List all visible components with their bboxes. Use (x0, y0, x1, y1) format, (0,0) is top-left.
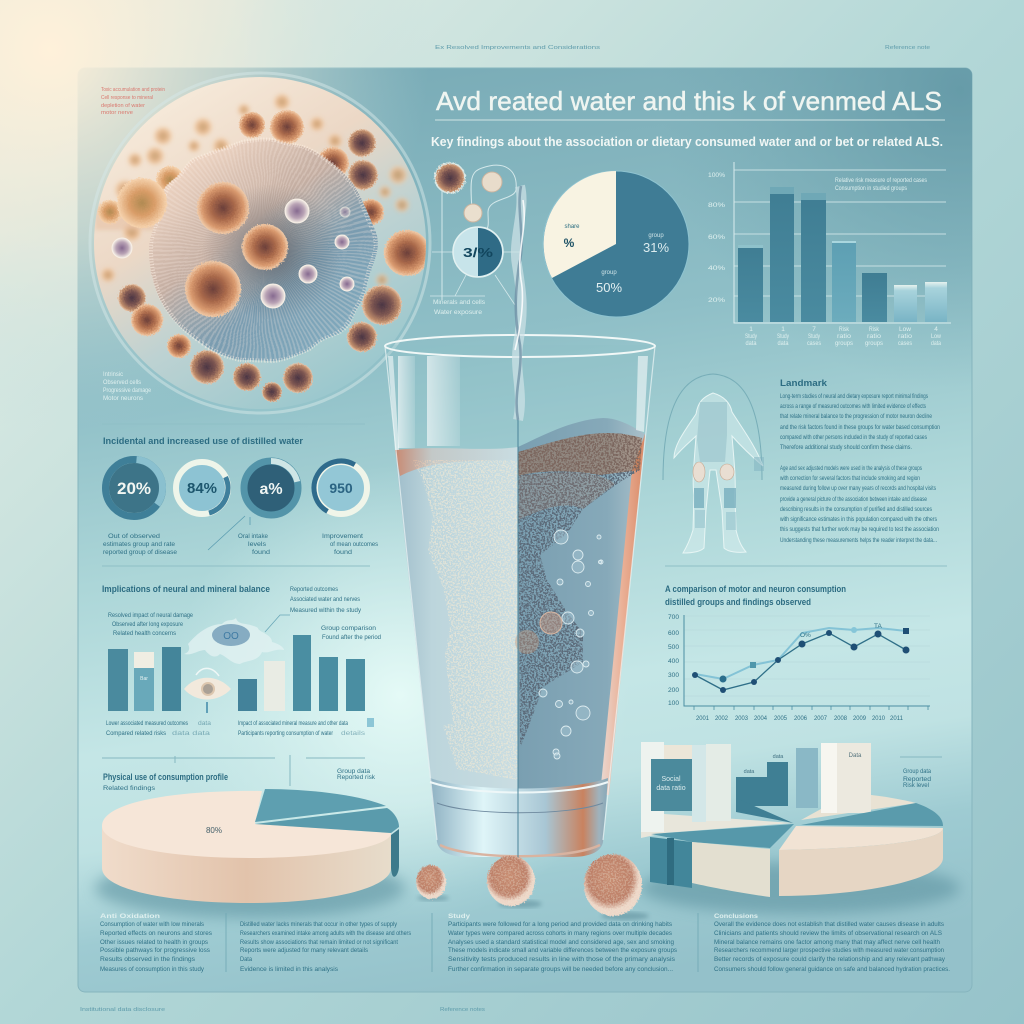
bar axis labels: data (746, 340, 757, 347)
dish note top (101, 87, 165, 116)
bar captions: Participants reporting consumption of water (238, 730, 334, 737)
donut captions: Improvement (322, 533, 363, 540)
large central cell (149, 139, 375, 361)
note: Reported risk (337, 774, 376, 781)
pie chart: 50% (596, 280, 622, 295)
section: line chart: distilled groups and findings observed (665, 597, 811, 607)
pie chart: group (601, 270, 617, 276)
donut captions: Out of observed (108, 533, 160, 540)
dish note bottom: Observed cells (103, 379, 142, 386)
line axis labels: 2011 (890, 715, 903, 722)
outer cells (98, 110, 430, 402)
line axis labels: 2003 (735, 715, 748, 722)
line axis labels: 2007 (814, 715, 827, 722)
bar chart top right (708, 162, 951, 347)
bar axis labels: groups (835, 340, 854, 347)
text block: right side paragraphs: Long-term studies of neural and dietary exposure report minimal findings (780, 393, 929, 400)
rust reflection right (600, 434, 645, 795)
text block: right side paragraphs: Age and sex adjusted models were used in the analysis of these groups (780, 465, 923, 472)
note: Group data (337, 768, 370, 775)
microscope dish with cells (90, 73, 430, 413)
column 3: Water types were compared across cohorts in many regions over multiple decades (448, 930, 673, 937)
line axis labels: O% (800, 632, 811, 639)
line axis labels: 2001 (696, 715, 709, 722)
line axis labels: 100 (668, 700, 679, 707)
blocks: Data (849, 753, 862, 759)
column 2: Data (240, 956, 252, 963)
text block: right side paragraphs: Understanding these measurements helps the reader interpret the data... (780, 537, 937, 544)
blocks (641, 742, 871, 832)
column 4: Better records of exposure could clarify the relationship and any relevant pathway (714, 956, 946, 963)
donut 4 (304, 451, 378, 525)
small donut: 3/% (463, 245, 494, 260)
small cell diagram with donut (430, 163, 520, 316)
bar chart top right: 20% (708, 297, 725, 304)
column 3: Study (448, 913, 470, 920)
donut 1 (103, 457, 165, 519)
title: Avd reated water and this k of venmed ALS (436, 86, 942, 116)
bar axis labels: Study (777, 333, 790, 340)
blocks: data (744, 769, 755, 775)
text block: right side paragraphs: compared with other persons included in the study of reported cases (780, 434, 928, 441)
line axis labels: 2010 (872, 715, 885, 722)
column 1: Anti Oxidation (100, 913, 160, 920)
heading: implications: Implications of neural and mineral balance (102, 584, 270, 594)
donut captions: found (334, 549, 352, 556)
dish note bottom: Intrinsic (103, 371, 124, 378)
bar axis labels: 1 (781, 326, 785, 333)
glass highlights (388, 356, 648, 450)
bar axis labels: Risk (869, 326, 880, 333)
icon: pale cell (482, 172, 502, 192)
subtitle: Key findings about the association or dietary consumed water and or bet or related ALS. (431, 134, 943, 149)
column 1: Reported effects on neurons and stores (100, 930, 213, 937)
column 1: Results observed in the findings (100, 956, 196, 963)
glass base (430, 778, 608, 857)
column 3: Analyses used a standard statistical model and considered age, sex and smoking (448, 939, 674, 946)
line axis labels: 2002 (715, 715, 728, 722)
split line (517, 418, 519, 858)
bubbles (539, 530, 603, 759)
donut 1: 20% (117, 479, 151, 498)
bar captions: Impact of associated mineral measure and other data (238, 720, 348, 727)
text block: right side paragraphs (779, 378, 940, 544)
icon: eye shape (184, 668, 231, 713)
heading: donuts: Incidental and increased use of distilled water (103, 436, 303, 446)
bar axis labels: data (778, 340, 789, 347)
donut 2 (167, 453, 237, 523)
text block: right side paragraphs: and the risk factors found in these groups for water based consumption (780, 424, 940, 431)
teal slab (651, 824, 794, 848)
pie labels: share (564, 224, 580, 230)
pie chart: group (648, 233, 664, 239)
note right: Reported (903, 776, 931, 783)
blocks: data ratio (656, 785, 686, 792)
line axis labels: 400 (668, 658, 679, 665)
text block: right side paragraphs: Therefore additional study should confirm these claims. (780, 444, 912, 451)
donut captions: levels (248, 541, 267, 548)
top strip captions: Ex Resolved Improvements and Considerations (435, 45, 600, 51)
section: donut statistics (102, 424, 379, 566)
bar axis labels: cases (807, 340, 822, 347)
bar chart top right: 60% (708, 234, 725, 241)
section: line chart (665, 566, 947, 722)
small donut (453, 227, 503, 277)
pie chart (543, 171, 689, 317)
donut captions: Oral intake (238, 533, 268, 540)
glass rim (385, 335, 655, 357)
column 3: Further confirmation in separate groups will be needed before any conclusion... (448, 966, 673, 973)
bar captions: data data (172, 730, 211, 737)
note right (903, 768, 931, 789)
donut captions: reported group of disease (103, 549, 177, 556)
line axis labels: 2004 (754, 715, 767, 722)
top strip captions (435, 45, 930, 51)
small pale vesicles (112, 199, 354, 308)
text: Reference notes (440, 1007, 485, 1013)
line axis labels: 700 (668, 614, 679, 621)
bar captions (106, 720, 366, 737)
bars: Bar (140, 676, 148, 682)
bar axis labels: 1 (749, 326, 753, 333)
heading: physical: Physical use of consumption profile (103, 772, 228, 782)
icon: neuron (184, 618, 284, 664)
column 4: Mineral balance remains one factor among many that may affect nerve cell health (714, 939, 940, 946)
bar axis labels: ratio (867, 333, 881, 340)
body figure (663, 374, 764, 553)
notes: Measured within the study (290, 607, 362, 614)
notes: Reported outcomes (290, 586, 339, 593)
line axis labels: TA (874, 623, 882, 630)
donut captions (103, 533, 379, 556)
bar axis labels: cases (898, 340, 913, 347)
donut 2: 84% (187, 480, 217, 497)
column 3: Participants were followed for a long period and provided data on drinking habits (448, 921, 673, 928)
water stream (515, 186, 524, 420)
column 4: Researchers recommend larger prospective studies with measured water consumption (714, 947, 944, 954)
column 4: Consumers should follow general guidance on safe and balanced hydration practices. (714, 966, 950, 973)
bottom text columns (100, 913, 950, 973)
icon: dark cell (435, 163, 465, 193)
cream slab right (779, 826, 943, 850)
line light series (695, 627, 909, 682)
bar axis labels: ratio (837, 333, 851, 340)
speckles left (410, 460, 518, 780)
column 1: Possible pathways for progressive loss (100, 947, 211, 954)
text block: right side paragraphs: provide a general picture of the association between intake and disease (780, 496, 927, 503)
chart note: Relative risk measure of reported cases (835, 177, 928, 184)
sphere small (416, 865, 446, 899)
notes: Associated water and nerves (290, 596, 361, 603)
donut captions: found (252, 549, 270, 556)
line axis labels: 2008 (834, 715, 847, 722)
bar captions: Compared related risks (106, 730, 167, 737)
dish note bottom: Motor neurons (103, 395, 144, 402)
cells on the large cell (117, 178, 288, 317)
bar axis labels: 7 (812, 326, 816, 333)
donut 3: a% (259, 481, 283, 498)
bar axis labels: Study (745, 333, 758, 340)
text block: right side paragraphs: describing results in the consumption of purified and distilled sources (780, 506, 933, 513)
sphere medium (487, 856, 535, 906)
dish note top: Cell response to mineral (101, 95, 153, 101)
text block: right side paragraphs: with significance estimates in this population compared with the others (779, 516, 938, 523)
section: right 3D chart (640, 742, 960, 914)
text block: right side paragraphs: across a range of measured outcomes with limited evidence of effects (780, 403, 927, 410)
column 3 (448, 913, 678, 973)
bar axis labels: Low (899, 326, 911, 333)
line axis labels: 200 (668, 687, 679, 694)
line dark series (692, 630, 910, 693)
column 2: Reports were adjusted for many relevant details (240, 947, 369, 954)
cream slab middle (692, 842, 770, 897)
chart note: Consumption in studied groups (835, 185, 908, 192)
dish note bottom: Progressive damage (103, 387, 151, 394)
section: left 3D pie chart: 80% (206, 826, 222, 835)
top strip captions: Reference note (885, 45, 930, 51)
blocks: data (773, 754, 784, 760)
bar captions: Lower associated measured outcomes (106, 720, 189, 727)
line axis labels (668, 614, 903, 722)
bar axis labels: ratio (898, 333, 912, 340)
bar axis labels: groups (865, 340, 884, 347)
icon: neuron: OO (223, 631, 239, 642)
column 2 (240, 921, 412, 973)
teal wedge right (801, 803, 943, 826)
text block: right side paragraphs: this suggests that further work may be required to test the association (780, 526, 939, 533)
text block: right side paragraphs: that relate mineral balance to the progression of motor neuron decline (780, 413, 932, 420)
footer caption: Institutional data disclosure (80, 1007, 165, 1013)
notes: Observed after long exposure (112, 621, 183, 628)
heading: line chart: A comparison of motor and neuron consumption (665, 584, 846, 594)
line axis labels: 600 (668, 630, 679, 637)
text block: right side paragraphs: measured during follow up over many years of records and hospital visits (780, 485, 937, 492)
column 2: Evidence is limited in this analysis (240, 966, 339, 973)
back slab (641, 813, 793, 838)
water left (395, 447, 518, 795)
donut captions: estimates group and rate (103, 541, 175, 548)
sphere large (584, 854, 642, 916)
glass of water (385, 335, 655, 858)
text block: right side paragraphs: Landmark (780, 378, 828, 388)
column 2: Researchers examined intake among adults with the disease and others (240, 930, 412, 937)
donut 4: 950 (329, 480, 353, 496)
line axis labels: 500 (668, 644, 679, 651)
spiky spheres (416, 854, 649, 920)
pie chart: 31% (643, 240, 669, 255)
bars (108, 635, 365, 711)
donut captions: of mean outcomes (330, 541, 379, 548)
bar axis labels: Risk (839, 326, 850, 333)
notes: Resolved impact of neural damage (108, 612, 193, 619)
column 1: Other issues related to health in groups (100, 939, 209, 946)
column 1: Consumption of water with low minerals (100, 921, 205, 928)
bar axis labels: 4 (934, 326, 938, 333)
small cell diagram with donut: Minerals and cells (433, 299, 486, 306)
note right: Risk level (903, 782, 930, 789)
blurred background cells (95, 94, 409, 286)
bar chart top right: 40% (708, 265, 725, 272)
bar axis labels: Study (808, 333, 821, 340)
section: left 3D pie chart: Related findings (103, 785, 156, 792)
section: left 3D pie chart (95, 755, 405, 918)
column 1: Measures of consumption in this study (100, 966, 205, 973)
column 2: Results show associations that remain limited or not significant (240, 939, 398, 946)
glass body (385, 345, 655, 857)
notes: Related health concerns (113, 630, 177, 637)
column 3: Sensitivity tests produced results in line with those of the primary analysis (448, 956, 676, 963)
column 3: These models indicate small and variable differences between the exposure groups (448, 947, 678, 954)
dish note top: Toxic accumulation and protein (101, 87, 165, 93)
water right (518, 418, 645, 795)
icon: pale cell small (464, 204, 482, 222)
speckles right dark (518, 433, 642, 748)
dish note top: motor nerve (101, 110, 133, 116)
bar axis labels (745, 326, 941, 347)
line axis labels: 2005 (774, 715, 787, 722)
line axis labels: 2006 (794, 715, 807, 722)
notes: Group comparison (321, 625, 376, 632)
chart note (835, 177, 928, 192)
line axis labels: 2009 (853, 715, 866, 722)
dish note bottom (103, 371, 151, 402)
note right: Group data (903, 768, 931, 775)
bar axis labels: data (931, 340, 941, 347)
notes: Found after the period (322, 634, 381, 641)
notes (108, 586, 381, 641)
bar chart top right: 100% (708, 172, 725, 179)
section: implications bar chart (102, 584, 381, 737)
column 4: Overall the evidence does not establish that distilled water causes disease in adults (714, 921, 945, 928)
legend swatch (367, 718, 374, 727)
column 4: Clinicians and patients should review the limits of observational research on ALS (714, 930, 943, 937)
bar captions: details (341, 730, 366, 737)
text block: right side paragraphs: with correction for several factors that include smoking and region (779, 475, 920, 482)
column 2: Distilled water lacks minerals that occur in other types of supply (240, 921, 398, 928)
bar captions: data (198, 720, 211, 727)
column 4 (714, 913, 950, 973)
bar chart top right: 80% (708, 202, 725, 209)
rust edge left (395, 447, 518, 476)
column 4: Conclusions (714, 913, 758, 920)
pie chart: % (564, 236, 575, 250)
note (337, 768, 376, 781)
line axis labels: 300 (668, 672, 679, 679)
bar axis labels: Low (931, 333, 941, 340)
column 1 (100, 913, 213, 973)
blocks: Social (661, 776, 681, 783)
small cell diagram with donut: Water exposure (434, 309, 482, 316)
donut 3 (244, 461, 298, 515)
dish note top: depletion of water (101, 103, 145, 109)
